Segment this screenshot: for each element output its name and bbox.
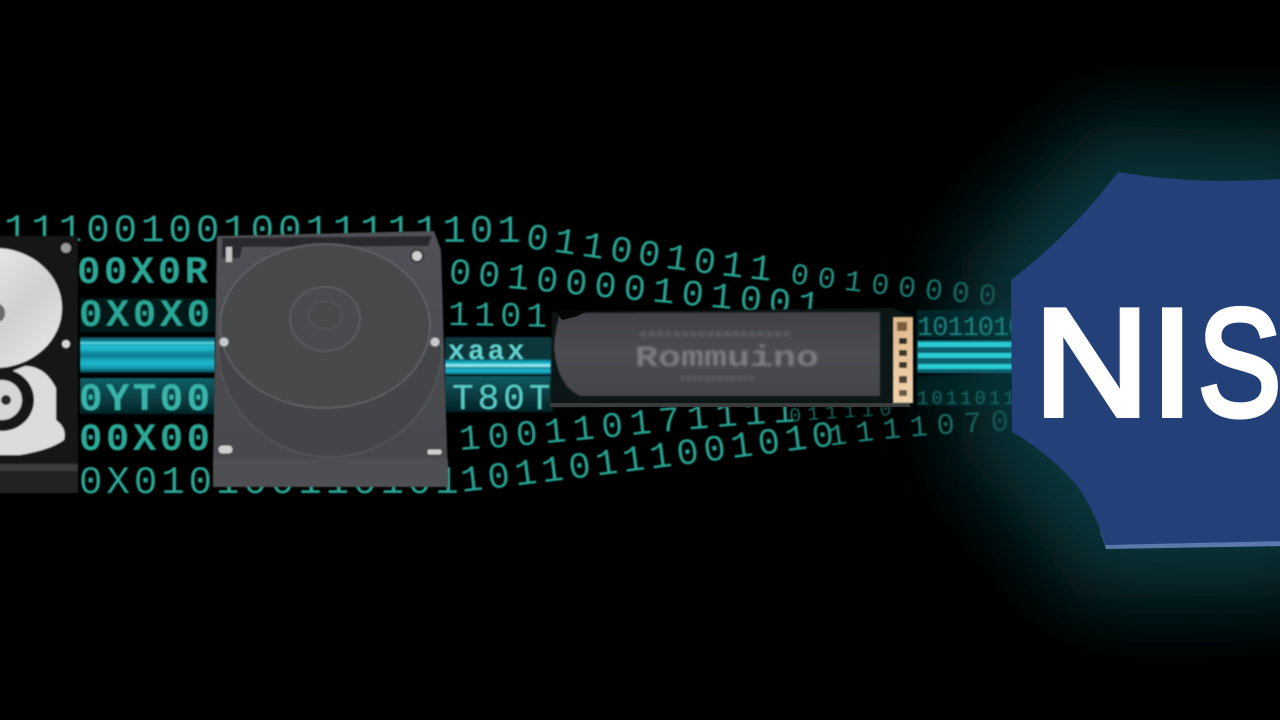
- binary digit rows: 0YT00: [80, 383, 209, 412]
- SSD label: Rommuino: [635, 342, 819, 376]
- SSD connector pins: [893, 317, 913, 403]
- cyan band: left: [80, 337, 215, 373]
- binary digit rows: 10110101: [917, 314, 1039, 344]
- binary digit rows: 1011011: [917, 388, 1018, 410]
- screws: [62, 340, 70, 348]
- binary digit rows: 10110111001010: [461, 421, 832, 492]
- binary digit rows: [6, 214, 1039, 494]
- badge lettering: I: [1151, 278, 1193, 448]
- binary digit rows: T80T: [452, 384, 550, 410]
- teal glow around badge: [1012, 172, 1280, 548]
- cyan band: middle: [445, 359, 553, 375]
- left hard drive: [0, 236, 78, 493]
- platter: [0, 248, 62, 368]
- binary digit rows: 0X010100110101: [80, 466, 458, 494]
- actuator: [0, 366, 65, 455]
- binary digit rows: xaax: [448, 343, 524, 361]
- upper disc: [220, 244, 430, 408]
- binary digit rows: 0010000101001: [450, 258, 814, 310]
- band streaks: [80, 342, 1018, 369]
- SSD module: [550, 308, 913, 408]
- binary digit rows: 011110: [790, 407, 891, 422]
- binary data stream: [6, 214, 1039, 494]
- row glow panels: [80, 298, 1012, 414]
- binary digit rows: 011001011: [528, 224, 770, 282]
- hub: [290, 287, 360, 351]
- SSD label: mmmmmmmmmmmmmmmmmm: [640, 329, 791, 341]
- NIST badge: [1011, 172, 1280, 549]
- screws: [411, 250, 423, 262]
- SSD label: mmmmmmmmmmmm: [680, 375, 756, 384]
- binary digit rows: 0X0X0: [80, 299, 209, 328]
- binary digit rows: 1111070: [830, 410, 1008, 446]
- binary digit rows: 00X0R: [78, 256, 208, 284]
- SSD label: [635, 329, 819, 384]
- binary digit rows: 1101: [450, 301, 546, 328]
- cyan band: right: [917, 340, 1018, 373]
- binary digit rows: 1110010010011111101: [6, 214, 520, 244]
- centre hard drive: [213, 231, 448, 487]
- binary digit rows: 00X00: [80, 423, 209, 452]
- lower disc: [218, 345, 442, 457]
- badge lettering: [1034, 278, 1280, 448]
- badge lettering: N: [1034, 278, 1149, 448]
- badge lettering: S: [1198, 278, 1280, 448]
